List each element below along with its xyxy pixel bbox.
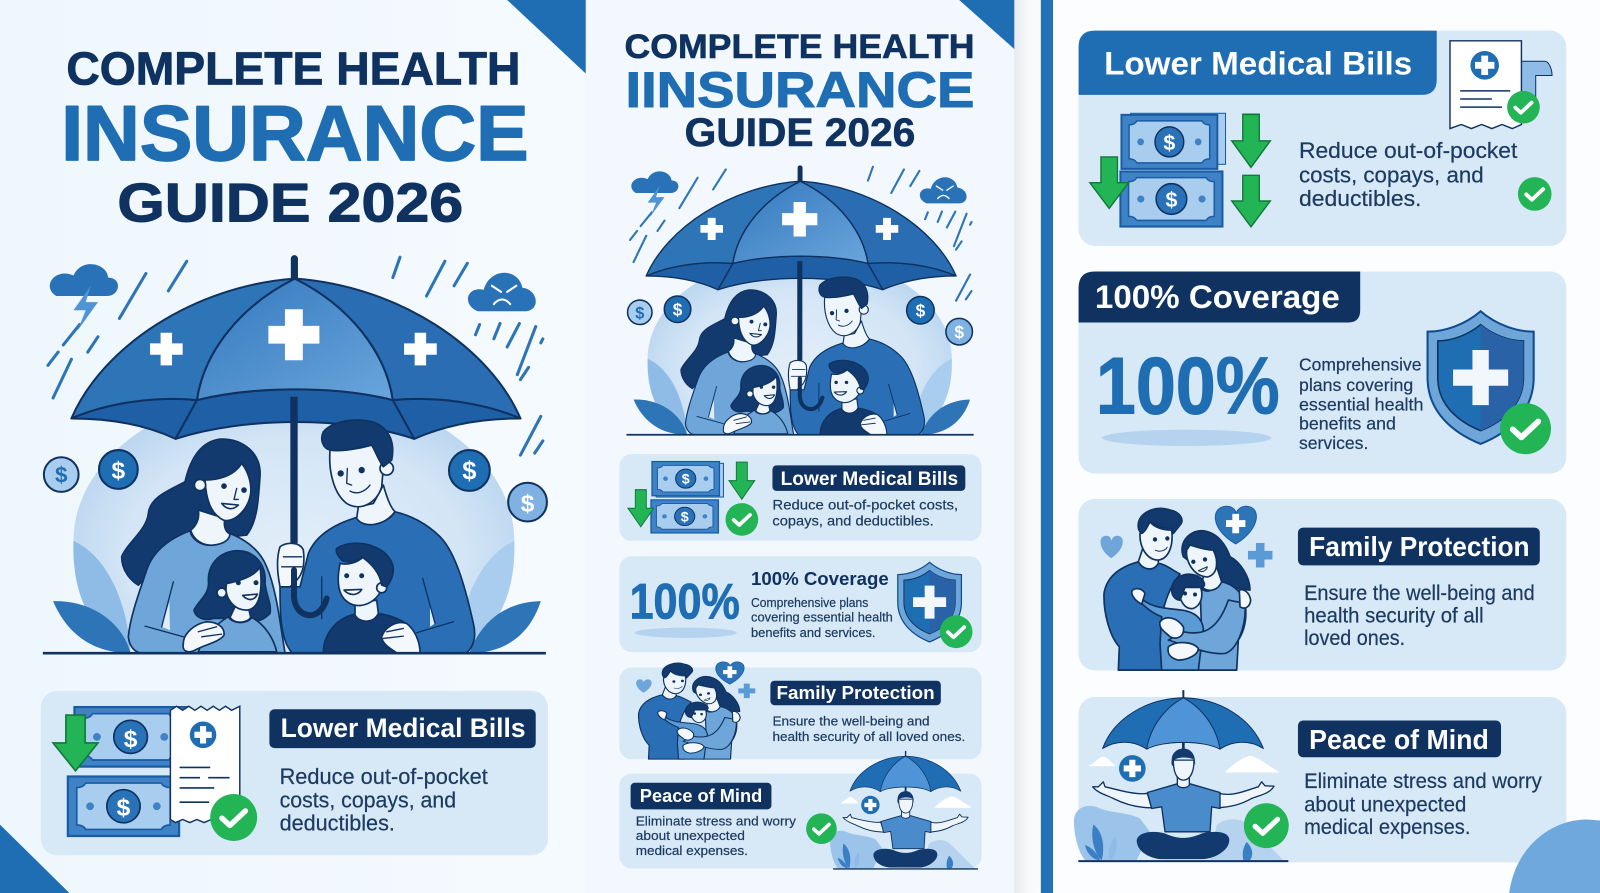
- icons: dollar coins: $: [112, 458, 126, 485]
- description: [1299, 138, 1518, 211]
- description: costs, copays, and: [1299, 163, 1484, 188]
- icons: dollar coins: $: [916, 300, 926, 320]
- big number: 100%: [630, 573, 740, 629]
- icon: bills and arrows: [628, 462, 758, 536]
- icon: stacked bills and arrows: $: [1165, 188, 1177, 212]
- title: middle poster: IINSURANCE: [626, 62, 974, 118]
- panel background: gap between posters: [1014, 0, 1041, 893]
- title: middle poster: GUIDE 2026: [685, 111, 915, 155]
- icon: storm clouds and rain: [48, 257, 543, 455]
- icon: bills and receipt: $: [117, 794, 131, 821]
- icons: dollar coins: [628, 296, 972, 345]
- panel: middle poster: [619, 28, 982, 869]
- description: medical expenses.: [636, 843, 748, 858]
- label: lower medical bills: [269, 709, 536, 748]
- description: health security of all loved ones.: [772, 729, 965, 744]
- icons: dollar coins: $: [521, 490, 535, 517]
- description: [280, 764, 488, 836]
- label text: Family Protection: [777, 682, 935, 703]
- title: middle poster: [624, 28, 974, 155]
- description: health security of all: [1304, 604, 1484, 628]
- corner shape right poster: [1509, 820, 1600, 893]
- card: peace of mind: [1074, 690, 1566, 862]
- description: deductibles.: [1299, 186, 1421, 211]
- title: left poster: COMPLETE HEALTH: [66, 43, 520, 95]
- icon: leaves: [53, 541, 541, 653]
- description: covering essential health: [751, 611, 893, 625]
- description: Comprehensive plans: [751, 596, 868, 610]
- description: Reduce out-of-pocket costs,: [772, 497, 958, 512]
- description: medical expenses.: [1304, 815, 1470, 839]
- icon: shield: [898, 562, 961, 642]
- panel background: middle poster: [586, 0, 1014, 893]
- description: [1299, 354, 1423, 453]
- label: [1298, 528, 1540, 565]
- card: family protection: [619, 662, 982, 759]
- big number: 100%: [1096, 341, 1280, 431]
- description: [751, 596, 893, 640]
- vertical blue strip: [1041, 0, 1053, 893]
- panel: right poster: [1074, 31, 1600, 893]
- description: about unexpected: [1304, 792, 1466, 816]
- icons: dollar coins: $: [55, 463, 68, 488]
- description: about unexpected: [636, 828, 745, 843]
- header banner: [1079, 271, 1360, 323]
- corner triangle top left poster: [507, 0, 586, 73]
- ground line: [43, 652, 546, 654]
- card: 100% coverage: [1079, 271, 1566, 474]
- icons: dollar coins: $: [954, 322, 964, 342]
- heading: 100% Coverage: [751, 568, 889, 589]
- icon: check: [1500, 403, 1551, 454]
- label text: Peace of Mind: [640, 785, 762, 806]
- icon: stacked bills and arrows: $: [1163, 131, 1175, 155]
- icon: shield: [1428, 311, 1534, 444]
- description: benefits and: [1299, 414, 1396, 434]
- panel background: right poster: [1053, 0, 1600, 893]
- description: services.: [1299, 433, 1368, 453]
- description: deductibles.: [280, 811, 395, 836]
- card: peace of mind: [619, 751, 982, 869]
- description: benefits and services.: [751, 626, 876, 640]
- description: Reduce out-of-pocket: [280, 764, 488, 789]
- description: [636, 814, 797, 858]
- icon: umbrella canopy: [71, 255, 520, 439]
- description: [772, 714, 965, 744]
- card: lower medical bills: [1079, 31, 1566, 246]
- corner triangle top middle poster: [959, 0, 1014, 49]
- icon: check: [940, 615, 972, 648]
- header text: 100% Coverage: [1095, 278, 1340, 315]
- icons: dollar coins: $: [462, 458, 476, 486]
- label: [770, 681, 941, 705]
- card: 100% coverage: [619, 556, 982, 652]
- icon: check: [806, 813, 837, 844]
- title: left poster: GUIDE 2026: [117, 171, 463, 233]
- label: [772, 465, 965, 491]
- illustration: family: [122, 397, 475, 653]
- illustration: family hug: [636, 662, 755, 759]
- icon: bills and arrows: $: [682, 472, 690, 488]
- header text: Lower Medical Bills: [1104, 44, 1412, 82]
- card: lower medical bills: [41, 691, 548, 855]
- corner triangle bottom left poster: [0, 825, 69, 893]
- label text: Lower Medical Bills: [281, 713, 526, 743]
- icon: bills and receipt: [53, 706, 257, 841]
- description: Ensure the well-being and: [1304, 581, 1535, 605]
- icon: bills and receipt: $: [124, 726, 138, 753]
- description: [1304, 581, 1535, 650]
- description: costs, copays, and: [280, 787, 456, 812]
- description: Reduce out-of-pocket: [1299, 138, 1518, 163]
- icons: dollar coins: $: [635, 304, 644, 322]
- card: family protection: [1079, 499, 1566, 671]
- title: left poster: [61, 43, 529, 233]
- description: loved ones.: [1304, 626, 1405, 650]
- illustration: relaxed person under umbrella: [1074, 690, 1288, 861]
- description: copays, and deductibles.: [772, 514, 934, 529]
- icon: check: [1244, 803, 1289, 848]
- description: plans covering: [1299, 375, 1413, 395]
- icon: bills and arrows: $: [681, 510, 689, 526]
- shadow ellipse: [1102, 430, 1271, 446]
- panel: left poster: [41, 43, 548, 855]
- icon: medical document: [1450, 41, 1552, 129]
- description: Comprehensive: [1299, 354, 1422, 374]
- header banner: [1079, 31, 1437, 95]
- card: lower medical bills: [619, 454, 982, 541]
- label: [1298, 721, 1501, 757]
- description: Eliminate stress and worry: [636, 814, 797, 829]
- description: [1304, 769, 1542, 839]
- title: middle poster: COMPLETE HEALTH: [624, 28, 974, 66]
- icons: dollar coins: $: [673, 299, 683, 319]
- icons: hearts and plus: [1101, 506, 1272, 567]
- title: left poster: INSURANCE: [61, 91, 529, 177]
- shadow ellipse: [635, 628, 737, 638]
- label text: Lower Medical Bills: [781, 468, 958, 490]
- description: Eliminate stress and worry: [1304, 769, 1542, 793]
- icons: dollar coins: [44, 450, 547, 522]
- illustration: background blob: [73, 388, 514, 694]
- illustration: family hug: [1104, 508, 1251, 670]
- icon: check: [1518, 177, 1552, 211]
- panel background: left poster: [0, 0, 586, 893]
- description: essential health: [1299, 394, 1423, 414]
- label: [631, 783, 771, 809]
- label text: Peace of Mind: [1309, 724, 1489, 755]
- label text: Family Protection: [1309, 531, 1530, 562]
- description: Ensure the well-being and: [772, 714, 930, 729]
- icon: stacked bills and arrows: [1090, 113, 1270, 227]
- illustration: hero scene: [627, 165, 974, 462]
- description: [772, 497, 958, 529]
- illustration: relaxed person under umbrella: [830, 751, 978, 869]
